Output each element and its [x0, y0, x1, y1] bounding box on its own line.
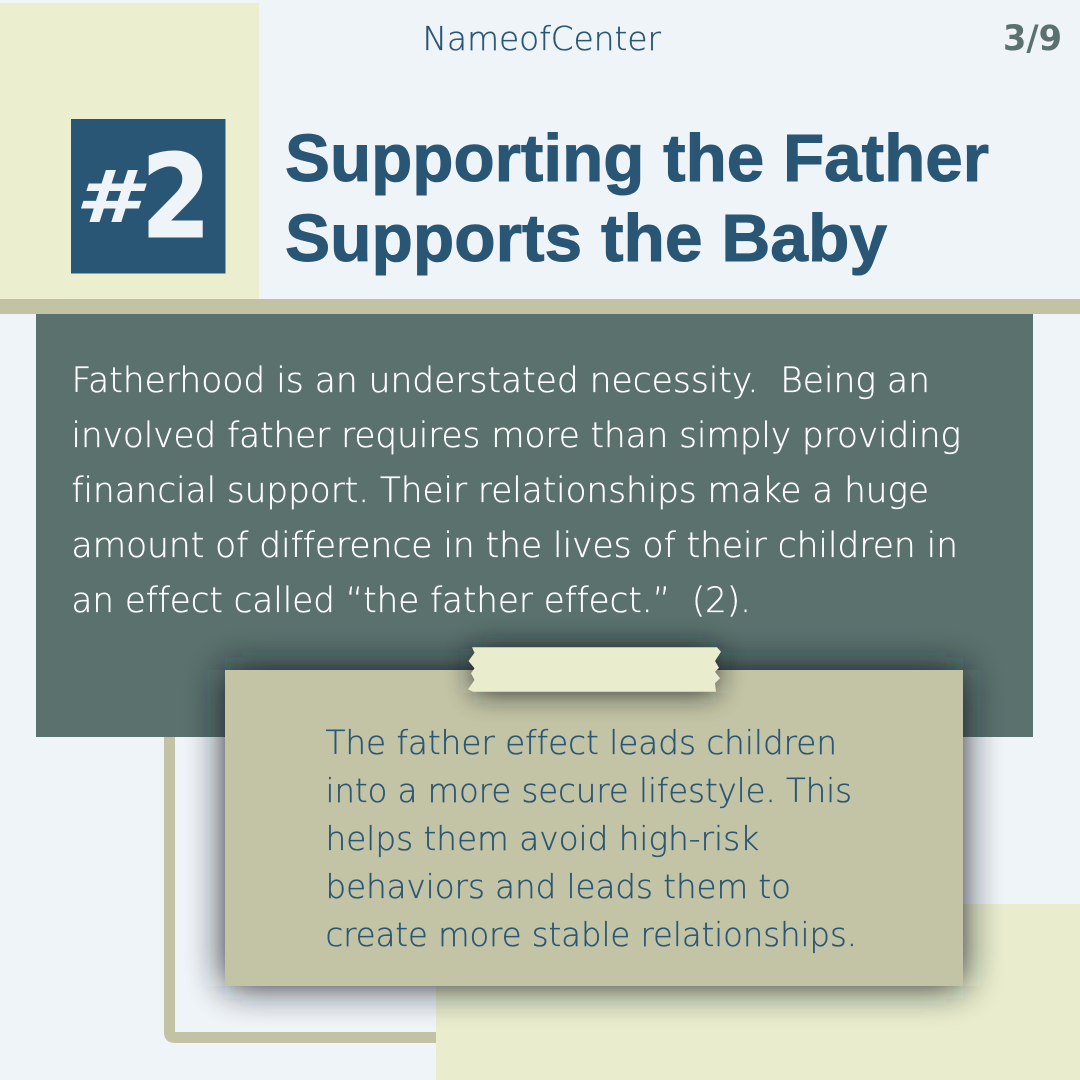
- tape: [468, 647, 721, 692]
- callout: taped note: into a more secure lifestyle. This: [326, 771, 852, 810]
- panel: fatherhood intro: amount of difference in the lives of their children in: [72, 526, 958, 566]
- corner block: top left: [0, 3, 259, 299]
- callout: taped note: create more stable relationships.: [326, 915, 857, 954]
- corner block: bottom right: [436, 904, 1080, 1080]
- panel: fatherhood intro: involved father requires more than simply providing: [72, 416, 961, 456]
- header bar: [0, 299, 1080, 314]
- callout: taped note: The father effect leads children: [326, 723, 837, 762]
- tape shadow: [474, 649, 716, 693]
- number badge: 2: [141, 130, 211, 265]
- panel: fatherhood intro: financial support. Their relationships make a huge: [72, 471, 929, 511]
- title: Supporting the Father: [285, 121, 989, 196]
- panel: fatherhood intro: an effect called “the father effect.” (2).: [72, 581, 751, 621]
- panel: fatherhood intro: [36, 314, 1033, 737]
- callout: taped note: [225, 670, 963, 986]
- center name: NameofCenter: [422, 19, 661, 58]
- number badge: [71, 119, 226, 274]
- callout: taped note: behaviors and leads them to: [326, 867, 791, 906]
- title: Supports the Baby: [285, 201, 887, 276]
- title: [285, 121, 989, 276]
- panel: fatherhood intro: Fatherhood is an understated necessity. Being an: [72, 361, 930, 401]
- note card shadow: [225, 670, 963, 986]
- page number: 3/9: [1003, 19, 1062, 59]
- callout: taped note: helps them avoid high-risk: [326, 819, 759, 858]
- decorative outline frame: [170, 737, 436, 1038]
- number badge: #: [75, 155, 148, 239]
